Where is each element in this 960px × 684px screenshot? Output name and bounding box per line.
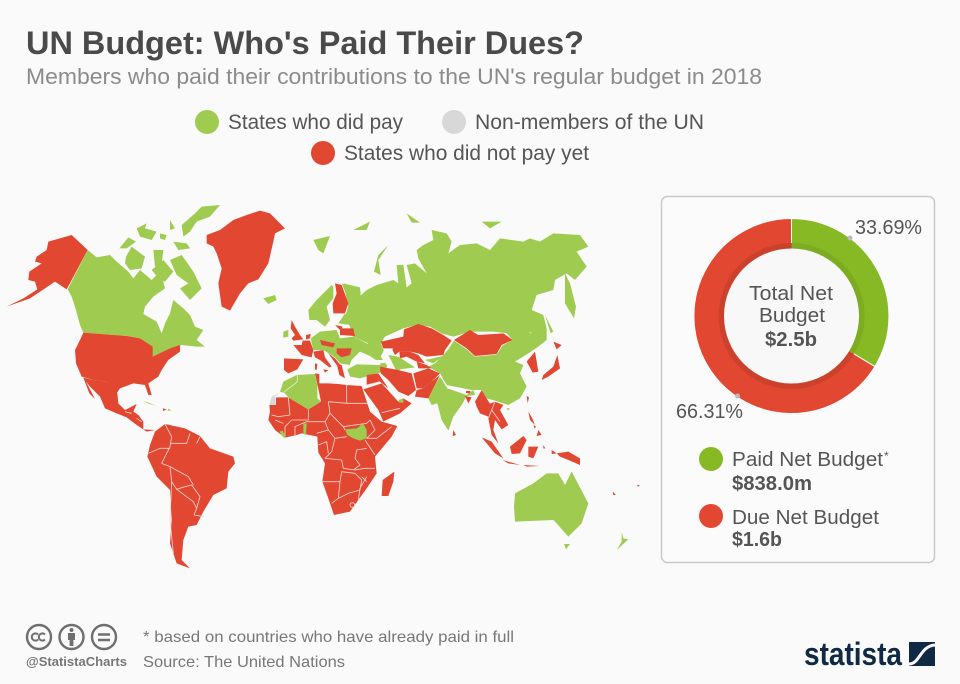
Philippines (528, 412, 542, 436)
map: Canadian Arctic (119, 205, 220, 300)
South Sudan (345, 423, 367, 441)
legend: paid net budget (699, 447, 889, 495)
legend: paid net budget: * (884, 449, 889, 463)
Italy (313, 350, 332, 373)
Finland (333, 283, 348, 313)
logo icon (909, 642, 935, 666)
subtitle: Members who paid their contributions to the UN's regular budget in 2018 (26, 64, 762, 89)
Australia (514, 472, 588, 537)
Kazakhstan (381, 324, 452, 357)
Bangladesh (465, 396, 472, 403)
New Zealand (617, 532, 628, 550)
Kola and Karelia (338, 283, 362, 325)
Uzbekistan (399, 352, 425, 363)
map legend (195, 110, 704, 165)
Pakistan (415, 375, 440, 398)
map: Eurasia and Oceania base (263, 213, 640, 550)
Middle East (367, 373, 388, 388)
legend: paid net budget: Paid Net Budget (732, 449, 883, 471)
Kyrgyzstan (425, 356, 443, 363)
UAE (398, 398, 403, 403)
Arabian Peninsula (363, 383, 412, 422)
Western Sahara (269, 393, 280, 405)
statista logo: statista (804, 636, 902, 672)
Thailand, Laos, Cambodia, Vietnam, Malaysia (487, 402, 508, 443)
licence icons (27, 625, 116, 649)
UK (291, 320, 303, 341)
label: 33.69%: 33.69% (855, 217, 922, 239)
African borders (272, 385, 392, 503)
Bhutan (466, 391, 471, 393)
legend: states who did pay: States who did pay (228, 111, 403, 134)
legend: due net budget: $1.6b (732, 529, 782, 551)
Mongolia (454, 330, 513, 356)
map: Europe (283, 283, 390, 378)
China (428, 320, 542, 405)
legend: due net budget: Due Net Budget (732, 507, 879, 529)
West African green states (279, 423, 307, 438)
title: UN Budget: Who's Paid Their Dues? (26, 25, 584, 61)
central and eastern Europe (311, 330, 370, 365)
donut centre text (749, 283, 833, 351)
Black Sea (350, 352, 385, 364)
USA (75, 333, 180, 395)
map: Americas (7, 211, 285, 568)
Sri Lanka (453, 430, 456, 436)
donut segment: due 66.31% (694, 218, 875, 413)
legend: paid net budget: $838.0m (732, 473, 812, 495)
Myanmar (475, 390, 492, 417)
Benelux (306, 334, 311, 339)
Africa (268, 373, 397, 515)
world map (7, 205, 640, 568)
Caspian Sea (381, 348, 397, 372)
Indonesia (482, 436, 557, 467)
donut centre text: Budget (759, 305, 825, 327)
donut centre text: $2.5b (765, 329, 817, 351)
Iran (380, 367, 416, 396)
Novaya Zemlya (374, 245, 388, 275)
Balkans (328, 353, 345, 378)
footnote: * based on countries who have already paid in full (143, 629, 514, 646)
Afghanistan (413, 368, 440, 388)
Baltics (335, 325, 343, 331)
Svalbard and Arctic islands (313, 213, 502, 253)
legend: states who did not pay: States who did not pay yet (344, 142, 589, 165)
Greenland (207, 211, 285, 311)
South America (147, 424, 235, 568)
India (428, 377, 475, 431)
Sakhalin (545, 315, 553, 333)
map: Asia (380, 320, 580, 467)
Papua (557, 452, 580, 465)
Spain and Portugal (284, 358, 303, 373)
Hainan (507, 408, 510, 411)
Morocco and Algeria (280, 374, 321, 409)
donut centre text: Total Net (749, 283, 833, 305)
Ireland (283, 330, 288, 338)
Czechia and Austria (320, 340, 335, 347)
panel: budget donut (662, 196, 934, 562)
donut chart (694, 218, 889, 413)
source: Source: The United Nations (143, 654, 345, 671)
donut segment: paid 33.69% (792, 218, 889, 367)
Fiji (613, 485, 640, 495)
Caribbean (143, 401, 172, 411)
Poland (340, 328, 355, 336)
Canada (68, 250, 205, 357)
Caucasus (380, 363, 390, 372)
Japan (542, 342, 562, 380)
Scandinavia (308, 285, 333, 327)
map: Africa and Middle East (268, 373, 412, 515)
legend: due net budget (699, 504, 879, 551)
Arctic islands (119, 205, 220, 300)
Mexico and Central America (83, 378, 155, 432)
Korea (527, 352, 538, 373)
donut centre (724, 248, 859, 384)
Taiwan (527, 396, 529, 403)
Turkey (347, 364, 383, 378)
France (293, 341, 313, 357)
Madagascar (382, 472, 394, 496)
label: 66.31%: 66.31% (676, 401, 743, 423)
Alaska (7, 235, 88, 307)
Tajikistan (417, 362, 432, 368)
Turkmenistan (388, 355, 415, 372)
Iceland (263, 295, 277, 304)
Bulgaria (340, 357, 352, 363)
Kamchatka (565, 273, 576, 318)
handle: @StatistaCharts (26, 655, 127, 669)
Russia (343, 230, 588, 360)
Romania (337, 348, 352, 357)
Tasmania (564, 544, 570, 549)
legend: non-members: Non-members of the UN (475, 111, 704, 134)
